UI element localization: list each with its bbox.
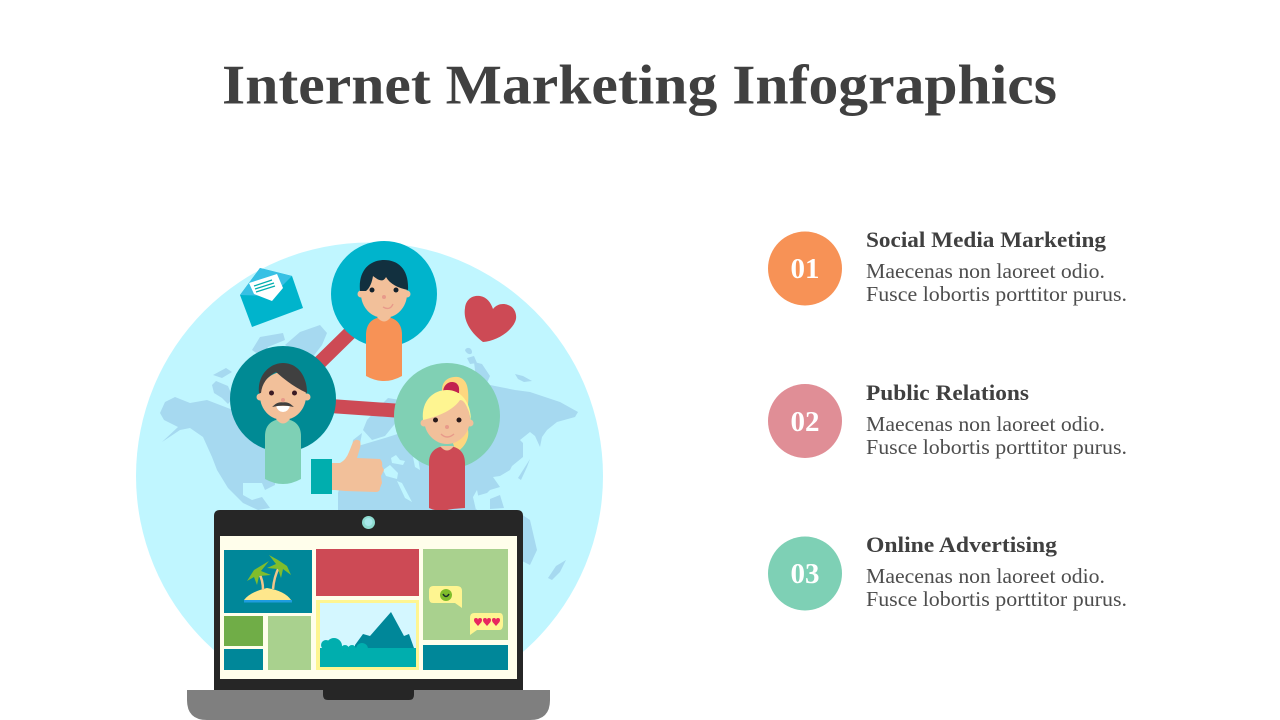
person: right woman: [394, 363, 500, 511]
description 02: Maecenas non laoreet odio.: [866, 412, 1105, 436]
connector lines: [310, 325, 402, 411]
item 02: public relations: [768, 380, 1127, 459]
tile: teal right: [423, 645, 508, 670]
description 03: [866, 564, 1127, 611]
description 03: Maecenas non laoreet odio.: [866, 564, 1105, 588]
tile: green chat: [423, 549, 508, 640]
badge 02: [768, 384, 842, 458]
person: left man with moustache: [230, 346, 336, 484]
laptop: [187, 510, 550, 720]
description 01: [866, 259, 1127, 306]
screen: [220, 536, 517, 679]
item 03: online advertising: [768, 532, 1127, 611]
tile: teal small: [224, 649, 263, 670]
tile: landscape photo: [316, 600, 419, 670]
chat bubble: hearts: [470, 613, 503, 635]
description 01: Maecenas non laoreet odio.: [866, 259, 1105, 283]
laptop notch: [323, 690, 414, 700]
heading 03: Online Advertising: [866, 532, 1057, 557]
badge 03: 03: [790, 558, 820, 590]
description 03: Fusce lobortis porttitor purus.: [866, 587, 1127, 611]
tile: light green: [268, 616, 311, 670]
icon: envelope: [240, 268, 303, 327]
badge 01: 01: [790, 253, 820, 285]
heading 02: Public Relations: [866, 380, 1029, 405]
tile: island photo: [224, 550, 312, 613]
globe: [136, 242, 603, 710]
description 02: Fusce lobortis porttitor purus.: [866, 435, 1127, 459]
person: top man: [331, 241, 437, 381]
scandinavia: [363, 398, 400, 440]
icon: heart: [465, 296, 516, 342]
icon: thumbs up: [311, 440, 384, 494]
badge 02: 02: [790, 406, 820, 438]
title: Internet Marketing Infographics: [222, 54, 1057, 116]
description 01: Fusce lobortis porttitor purus.: [866, 282, 1127, 306]
heading 01: Social Media Marketing: [866, 227, 1106, 252]
africa and eurasia: [338, 385, 578, 510]
laptop base: [187, 690, 550, 720]
webcam: [362, 516, 375, 529]
tile: dark green: [224, 616, 263, 646]
chat bubble: smile: [429, 586, 462, 608]
illustration: internet marketing: [136, 241, 603, 720]
item 01: social media marketing: [768, 227, 1127, 306]
tile: red: [316, 549, 419, 596]
laptop lid: [214, 510, 523, 690]
badge 03: [768, 536, 842, 610]
badge 01: [768, 232, 842, 306]
description 02: [866, 412, 1127, 459]
map seas: [383, 455, 480, 510]
